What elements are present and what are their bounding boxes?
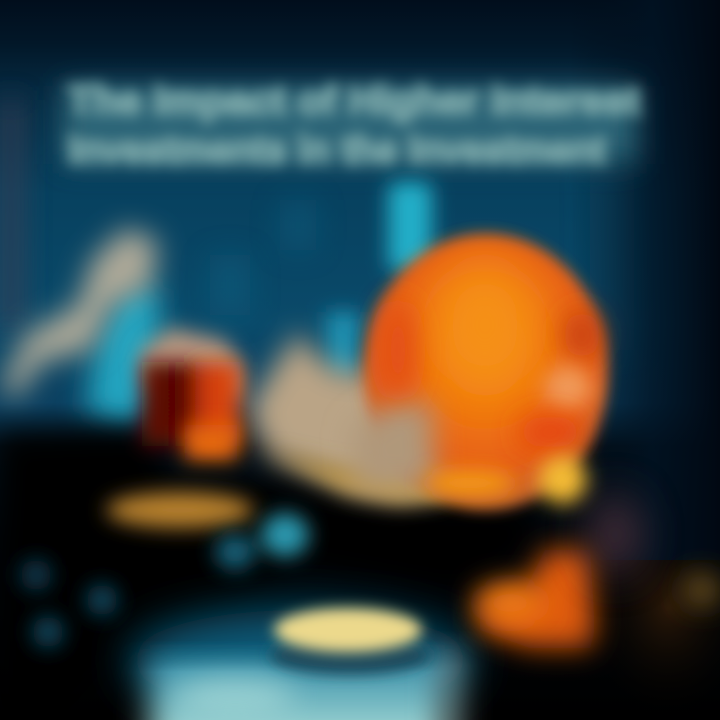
globe: left shade [380, 300, 416, 400]
chart: right cyan bar [326, 312, 360, 382]
cream disc [274, 608, 422, 652]
dark ground band [0, 430, 540, 720]
globe: central glow [437, 265, 533, 385]
globe: lower glow [425, 470, 515, 496]
teal dots [20, 513, 309, 648]
orange globe [352, 234, 608, 510]
central bars: beige mountain [248, 332, 442, 498]
reflected orange shape [476, 495, 720, 648]
globe: light spot [544, 366, 592, 410]
title haze [62, 86, 637, 164]
globe: right shade [564, 311, 600, 359]
pale blue cylinder [130, 608, 470, 720]
brown glow [684, 574, 720, 606]
title text: Investments in the Investment [68, 128, 606, 172]
title [62, 79, 640, 172]
dot pair [261, 513, 309, 557]
globe: red spot [518, 416, 582, 448]
globe: beige chart overlap [352, 398, 436, 488]
title text [68, 79, 640, 172]
chart: cyan bar top [388, 182, 432, 272]
small dots [20, 559, 52, 591]
title text: The Impact of Higher Interest [68, 79, 640, 123]
purple haze [591, 495, 639, 575]
chart: left line peak [0, 228, 165, 425]
cylinder shadow [270, 635, 430, 675]
red-orange cube [140, 328, 242, 460]
central bars: golden base [270, 452, 445, 502]
golden disc left [106, 492, 254, 528]
globe: yellow spot [539, 456, 587, 504]
